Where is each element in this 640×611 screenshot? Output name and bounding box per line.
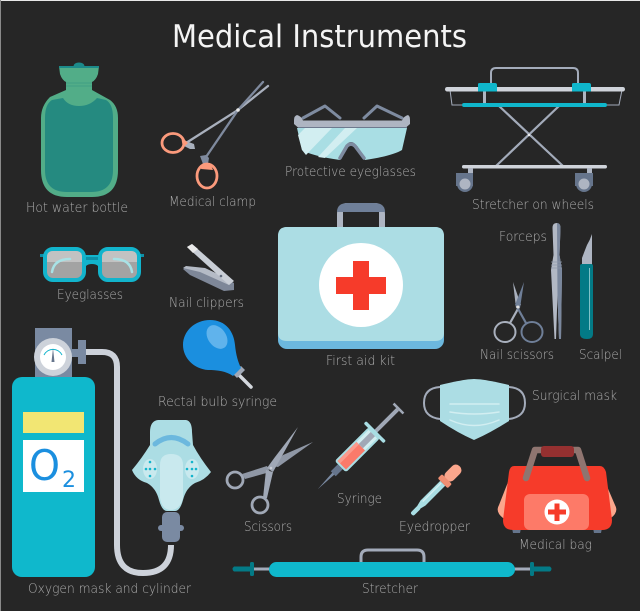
item: eyeglasses	[40, 249, 144, 303]
item: surgical mask	[424, 379, 617, 440]
cylinder	[12, 377, 95, 577]
item: forceps	[499, 223, 562, 339]
item: nail clippers	[169, 244, 244, 311]
item: first aid kit	[278, 203, 444, 369]
title: Medical Instruments	[172, 19, 467, 55]
label: Syringe	[337, 492, 382, 507]
icon: syringe	[308, 398, 409, 499]
label: Eyedropper	[399, 520, 471, 535]
item: hot water bottle	[26, 62, 128, 216]
label: Nail clippers	[169, 296, 244, 311]
label: Nail scissors	[480, 348, 554, 363]
item: medical clamp	[162, 82, 268, 210]
icon: nail scissors	[494, 282, 542, 342]
icon: eyedropper	[407, 461, 465, 519]
item: medical bag	[498, 446, 616, 553]
item: eyedropper	[399, 461, 471, 535]
icon: protective eyeglasses	[294, 106, 410, 160]
label: Forceps	[499, 230, 547, 245]
label: Medical bag	[519, 538, 592, 553]
icon: forceps	[551, 223, 562, 339]
label: Scalpel	[579, 348, 622, 363]
label: Hot water bottle	[26, 201, 128, 216]
icon: hot water bottle	[41, 62, 118, 197]
valve	[35, 328, 86, 378]
item: scissors	[227, 427, 313, 535]
label: Protective eyeglasses	[285, 165, 416, 180]
item: syringe	[308, 398, 409, 507]
icon: medical bag	[498, 446, 616, 533]
item: protective eyeglasses	[285, 106, 416, 180]
icon: surgical mask	[424, 379, 525, 440]
label: Oxygen mask and cylinder	[28, 582, 192, 597]
item: nail scissors	[480, 282, 554, 363]
icon: stretcher	[232, 550, 552, 577]
icon: oxygen mask and cylinder	[12, 328, 211, 577]
icon: stretcher on wheels	[445, 68, 625, 192]
icon: scalpel	[580, 234, 593, 339]
gauge	[34, 338, 72, 376]
item: stretcher	[232, 550, 552, 597]
label: Scissors	[244, 520, 292, 535]
label: Stretcher	[362, 582, 419, 597]
label: Rectal bulb syringe	[158, 395, 277, 410]
tube	[84, 352, 171, 573]
mask	[132, 420, 211, 542]
label: First aid kit	[326, 354, 395, 369]
icon: eyeglasses	[40, 249, 144, 280]
icon: nail clippers	[183, 244, 234, 291]
label: Medical clamp	[169, 195, 256, 210]
label: Eyeglasses	[57, 288, 123, 303]
icon: first aid kit	[278, 203, 444, 349]
label: Stretcher on wheels	[472, 198, 594, 213]
item: rectal bulb syringe	[158, 320, 277, 410]
item: stretcher on wheels	[445, 68, 625, 213]
label: Surgical mask	[532, 389, 617, 404]
item: oxygen mask and cylinder	[12, 328, 211, 597]
icon: scissors	[227, 427, 313, 513]
icon: oxygen mask and cylinder: O	[29, 441, 60, 490]
icon: rectal bulb syringe	[183, 320, 251, 387]
icon: oxygen mask and cylinder: 2	[62, 468, 76, 493]
item: scalpel	[579, 234, 622, 363]
icon: medical clamp	[162, 82, 268, 188]
